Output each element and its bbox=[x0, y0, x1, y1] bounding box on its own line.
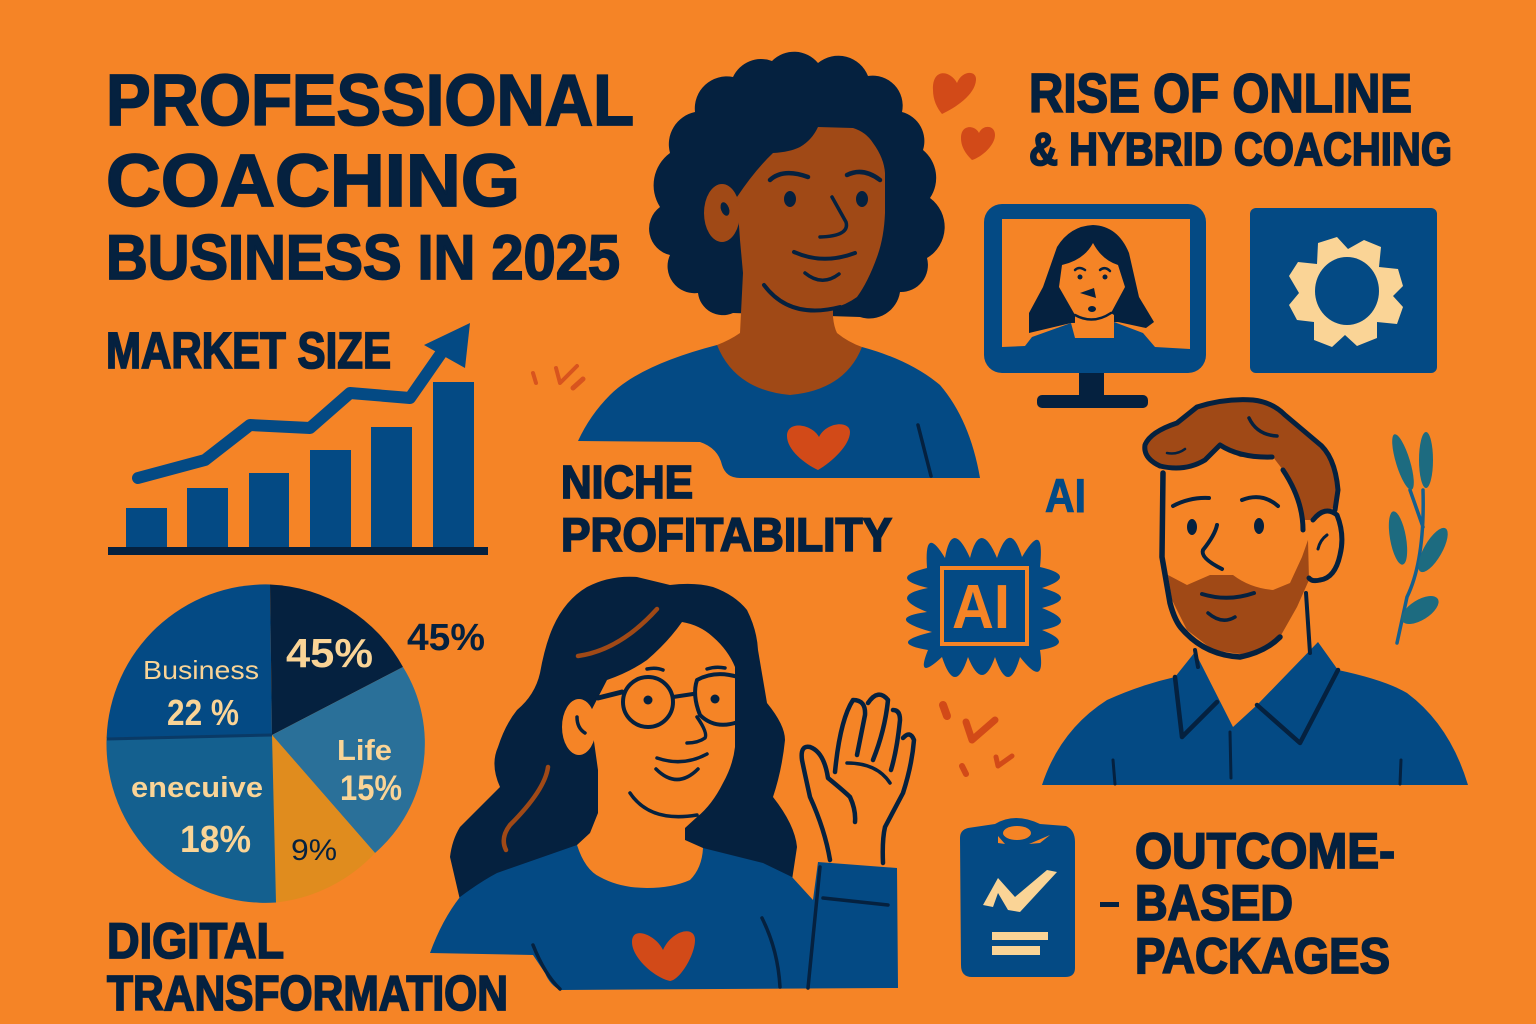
pie chart bbox=[106, 584, 425, 903]
bar chart: market growth bbox=[108, 323, 488, 555]
icon: clipboard bbox=[960, 818, 1075, 977]
shirt and sleeve bbox=[430, 845, 898, 990]
heading: rise of online and hybrid coaching: RISE OF ONLINE bbox=[1029, 62, 1412, 124]
illustration: bearded man bbox=[1042, 400, 1468, 785]
clothing folds bbox=[533, 867, 888, 989]
face line work bbox=[577, 667, 725, 817]
heart on shirt bbox=[632, 931, 695, 981]
ear bbox=[704, 184, 740, 242]
hair bbox=[1144, 400, 1338, 520]
heading: niche profitability bbox=[561, 456, 892, 561]
heading: market size: MARKET SIZE bbox=[106, 322, 391, 379]
heading: outcome-based packages: BASED bbox=[1135, 875, 1293, 931]
outer label: 45%: 45% bbox=[407, 617, 485, 659]
heading: outcome-based packages: PACKAGES bbox=[1135, 928, 1390, 984]
icon: video call monitor bbox=[984, 204, 1206, 408]
title bbox=[106, 61, 634, 293]
heading: rise of online and hybrid coaching: & HYBRID COACHING bbox=[1029, 123, 1452, 175]
pie label: executive: enecuive bbox=[131, 772, 263, 804]
pie label: business: Business bbox=[143, 655, 259, 685]
glasses bbox=[598, 674, 738, 727]
heart on shirt bbox=[787, 424, 850, 470]
heading: digital transformation bbox=[107, 913, 508, 1021]
sparks: near first woman bbox=[533, 366, 583, 388]
sparks: beside woman with glasses bbox=[943, 705, 1012, 774]
heading: digital transformation: TRANSFORMATION bbox=[107, 967, 508, 1021]
pie label: life: Life bbox=[337, 735, 392, 767]
plant sprig bbox=[1385, 432, 1453, 643]
title: PROFESSIONAL bbox=[106, 61, 634, 141]
pie label: 45%: 45% bbox=[286, 630, 373, 676]
shirt bbox=[1042, 642, 1468, 785]
facial features bbox=[719, 172, 931, 476]
pie label: business bbox=[143, 655, 259, 733]
pie label: executive bbox=[131, 772, 263, 861]
waving hand bbox=[802, 695, 914, 863]
ear bbox=[562, 699, 596, 755]
dash before heading bbox=[1100, 902, 1119, 907]
heading: rise of online and hybrid coaching bbox=[1029, 62, 1452, 175]
beard bbox=[1168, 540, 1309, 655]
shirt bbox=[578, 345, 980, 478]
heading: digital transformation: DIGITAL bbox=[107, 913, 284, 969]
label: AI: AI bbox=[1045, 469, 1086, 522]
icon: AI chip: AI bbox=[952, 573, 1010, 642]
hair bbox=[450, 577, 797, 900]
heading: niche profitability: PROFITABILITY bbox=[561, 508, 892, 561]
illustration: woman with glasses waving bbox=[430, 577, 914, 990]
skin: face and neck bbox=[717, 127, 885, 400]
skin: face and neck bbox=[577, 622, 735, 890]
illustration: woman with curly hair bbox=[578, 52, 980, 478]
heading: outcome-based packages: OUTCOME- bbox=[1135, 823, 1395, 879]
hair highlights bbox=[504, 609, 657, 850]
line work bbox=[1113, 400, 1401, 784]
heading: outcome-based packages bbox=[1135, 823, 1395, 984]
heading: niche profitability: NICHE bbox=[561, 456, 693, 508]
pie label: 9%: 9% bbox=[291, 834, 337, 867]
title: COACHING bbox=[106, 139, 520, 222]
pie label: life: 15% bbox=[340, 769, 402, 808]
pie label: business: 22 % bbox=[167, 692, 239, 733]
pie label: life bbox=[337, 735, 402, 808]
title: BUSINESS IN 2025 bbox=[106, 223, 620, 293]
icon: AI chip bbox=[906, 538, 1061, 677]
icon: gear panel bbox=[1250, 208, 1437, 373]
pie label: executive: 18% bbox=[180, 819, 251, 861]
hearts: decoration top bbox=[933, 73, 995, 160]
